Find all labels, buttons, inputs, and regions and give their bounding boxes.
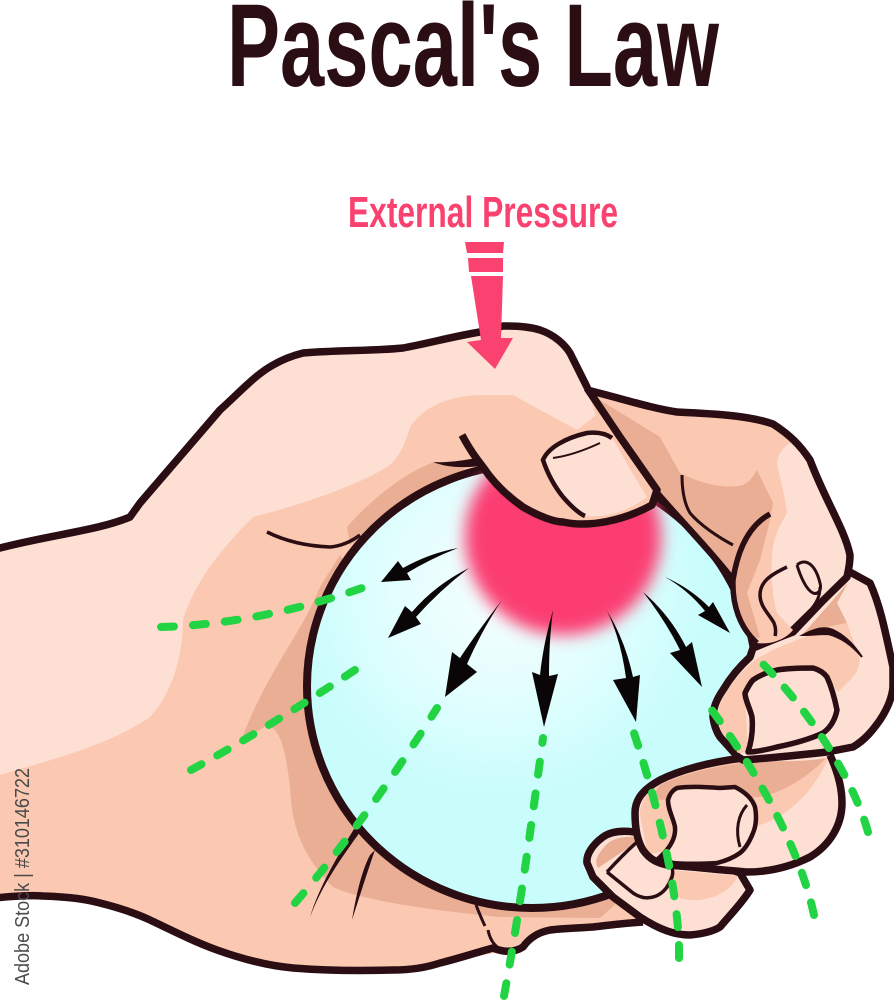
hand illustration [0,326,893,971]
pressure arrows [381,548,730,727]
index finger [587,390,850,643]
hand outline [0,326,587,548]
pressure glow [465,439,661,635]
pressure direction arrow [465,242,513,369]
ring finger [635,755,842,872]
label: External Pressure: External Pressure [348,188,618,237]
stock id text: Adobe Stock | #310146722 [12,768,34,985]
palm shadow [240,462,620,918]
stress ball [307,464,757,908]
green dashed pressure lines [161,587,868,996]
pinky finger [587,831,750,935]
middle finger [713,572,893,760]
thumb [462,388,657,524]
light skin area [0,326,600,775]
hand creases [267,458,505,951]
hand and wrist base [0,326,735,970]
